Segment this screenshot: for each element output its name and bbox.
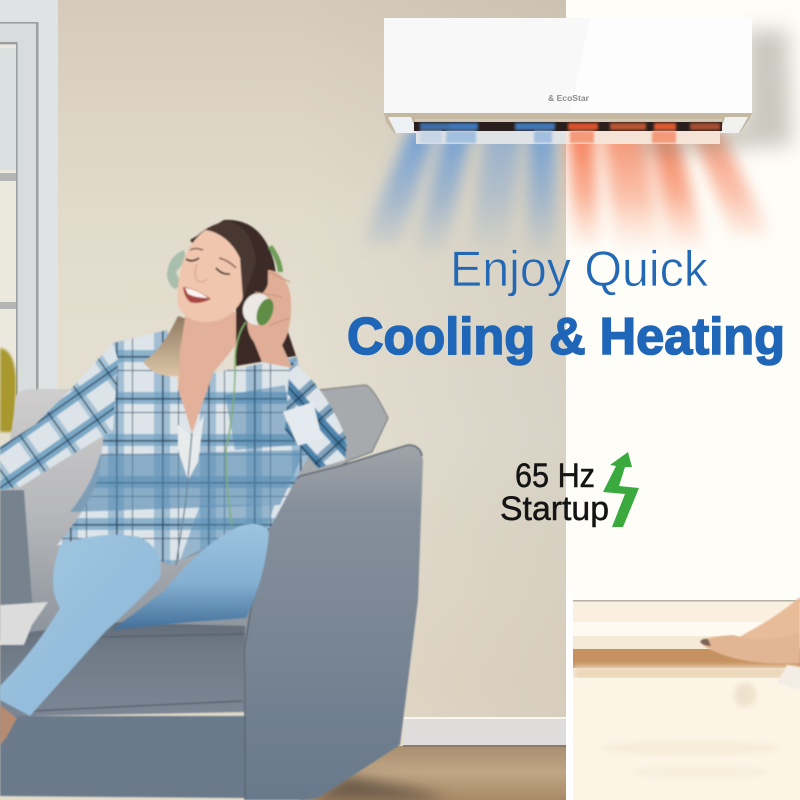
shirt blue band [70,450,305,512]
headphone cable [226,322,246,525]
headphone left cup [167,250,186,289]
icon: green lightning arrow [603,452,639,527]
sneaker [0,602,48,645]
shirt cuff [283,402,322,446]
wall shading towards the divide [300,0,566,720]
armchair back cushion [0,389,300,640]
wood floor, cool side [300,746,566,800]
headphone green pad [253,296,277,328]
woman's foot and heeled shoe [700,597,800,707]
closed eyes [186,258,230,274]
air conditioner shadow [640,30,792,155]
seat cushion [0,622,245,718]
panel: warm side floor and rug [566,590,800,800]
blonde hair strand [143,316,190,376]
armchair base [0,716,245,798]
seat piping [30,634,245,711]
bent leg [112,524,269,630]
raised leg [0,535,161,716]
bush outside window [0,348,16,432]
face [177,230,245,322]
fingers [255,272,290,325]
baseboard [403,717,566,747]
nose shadow [195,264,207,282]
white undershirt [178,415,204,480]
dark back hair [190,220,296,366]
smile [183,287,211,303]
shirt placket [176,433,192,565]
label: 65 Hz Startup: 65 Hz [515,457,595,495]
floor shadow [310,775,450,800]
headphone band [268,245,283,272]
lower shirt fade [180,505,275,560]
panel: warm side wall [566,0,800,800]
eyebrows [190,248,236,268]
heating air streams [568,128,770,252]
fringe hair [184,221,256,300]
woman listening to music [0,220,347,745]
raised hand [247,270,292,368]
label: 65 Hz Startup: Startup [500,490,609,528]
shirt arm left [0,343,118,490]
heading: Cooling & Heating: Cooling & Heating [347,308,785,366]
label: 65 Hz Startup [500,457,609,528]
heading: Enjoy Quick: Enjoy Quick [450,241,709,297]
window [0,0,58,400]
cooling air streams [362,128,555,258]
armchair pillow right [290,385,388,500]
ankle [0,705,17,745]
shirt arm right [285,360,347,468]
neck and chest [178,312,236,433]
air conditioner indoor unit [384,18,752,144]
arm piping [245,445,422,800]
torso shirt [57,330,312,565]
panel: cool side wall [0,0,566,800]
armchair [0,385,423,800]
armchair left arm [0,490,33,622]
armchair right arm [245,445,423,800]
brand logo: & EcoStar [548,93,590,103]
headphone right cup [238,289,276,329]
shirt pocket shade [225,385,295,450]
